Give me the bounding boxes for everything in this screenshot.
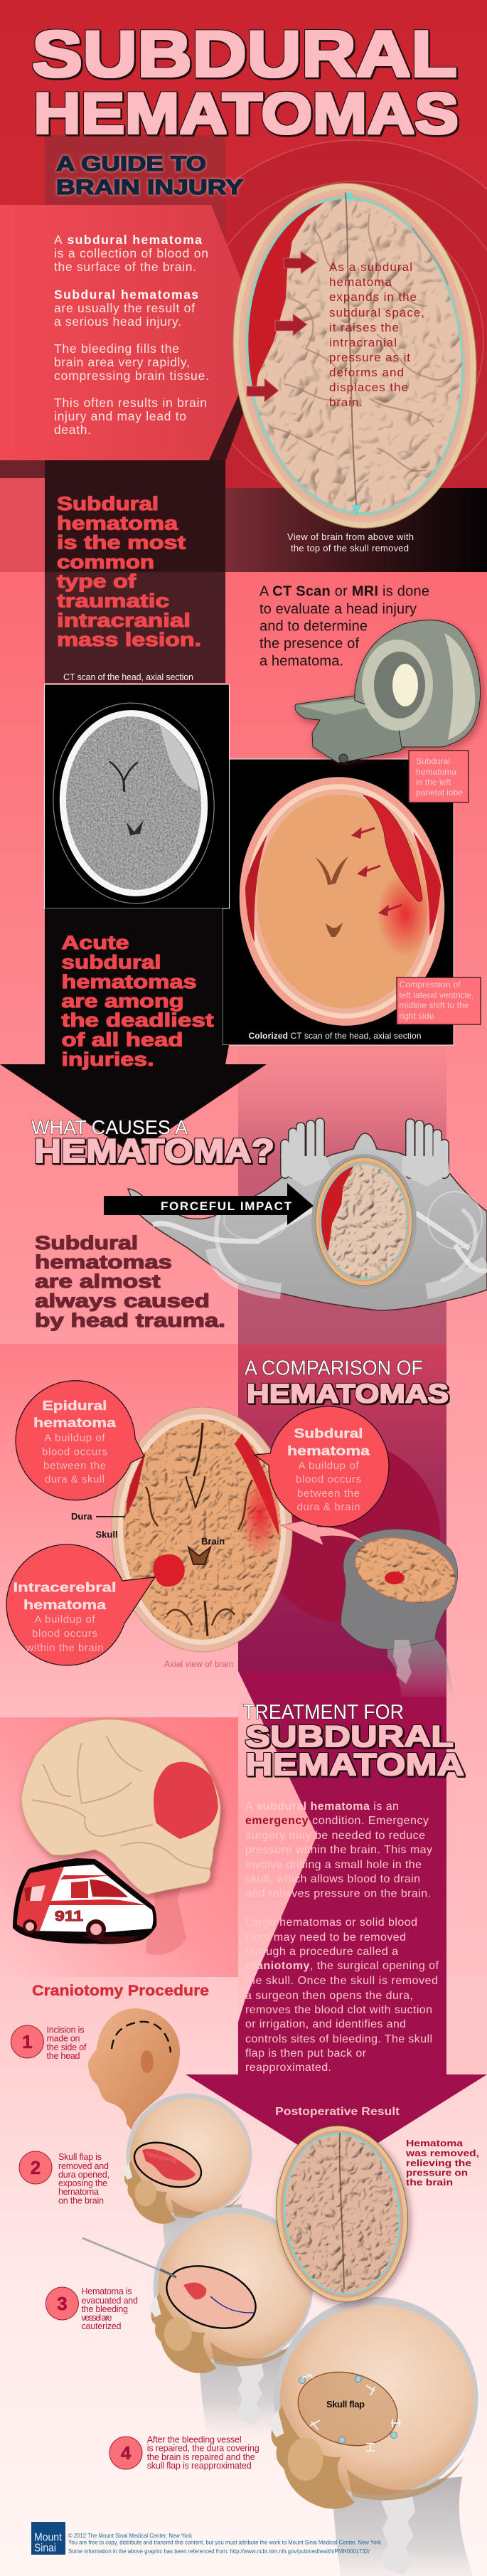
- callout: subdural in parietal lobe: in the left: [416, 777, 451, 787]
- text block: expansion explanation on brain: hematoma: [329, 275, 392, 289]
- text block: intro definition: A subdural hematoma: [54, 233, 202, 247]
- illustration: skull flap and exposed hematoma: [122, 2093, 252, 2276]
- text block: treatment explanation: and relieves pressure on the brain.: [245, 1888, 431, 1899]
- dark column behind intro: [45, 135, 225, 683]
- step 1: Incision is: [47, 2025, 84, 2035]
- step 1: [11, 2025, 87, 2061]
- label: skull: Skull: [95, 1530, 118, 1540]
- text block: treatment explanation: controls sites of bleeding. The skull: [245, 2033, 432, 2045]
- text block: treatment explanation: surgery may be needed to reduce: [245, 1830, 425, 1842]
- text block: treatment explanation: skull, which allows blood to drain: [245, 1873, 420, 1885]
- callout: subdural hematoma: A buildup of: [299, 1460, 359, 1472]
- title: HEMATOMAS: [33, 82, 459, 146]
- step 2: dura opened,: [58, 2170, 109, 2180]
- text block: treatment explanation: pressure within the brain. This may: [245, 1844, 432, 1856]
- step 3: vessel are: [81, 2313, 112, 2323]
- step 1: 1: [22, 2031, 33, 2052]
- callout: subdural hematoma: Subdural: [294, 1426, 363, 1441]
- step 2: on the brain: [58, 2195, 104, 2205]
- callout: subdural hematoma: dura & brain: [297, 1501, 360, 1513]
- text block: intro definition: a serious head injury.: [54, 314, 181, 329]
- text block: treatment explanation: A subdural hematoma is an: [245, 1801, 399, 1813]
- callout: acute subdural hematomas: subdural: [61, 952, 161, 973]
- panel: colourised CT background: [223, 759, 454, 1045]
- text block: CT or MRI: the presence of: [259, 636, 359, 652]
- step 4: 4: [121, 2442, 132, 2464]
- heading: what causes a hematoma: HEMATOMA?: [34, 1132, 274, 1170]
- text block: hematoma removed: [405, 2138, 479, 2188]
- text block: intro definition: Subdural hematomas: [54, 287, 198, 302]
- step 3: 3: [57, 2293, 68, 2314]
- dark lower band across the page: [0, 460, 487, 683]
- step 3: cauterized: [81, 2321, 122, 2331]
- text block: treatment explanation: craniotomy, the surgical opening of: [245, 1960, 439, 1972]
- heading: comparison of hematomas: [245, 1357, 449, 1409]
- callout: caused by head trauma: are almost: [35, 1271, 161, 1292]
- illustration: axial view of brain: [112, 1407, 292, 1652]
- callout: epidural hematoma: hematoma: [33, 1416, 117, 1430]
- illustration: MRI scanner: [295, 620, 481, 763]
- callout: acute subdural hematomas: injuries.: [61, 1049, 154, 1070]
- step 3: [46, 2286, 138, 2331]
- step 4: is repaired, the dura covering: [147, 2444, 259, 2454]
- callout: acute subdural hematomas: hematomas: [61, 971, 196, 992]
- label: dura: Dura: [71, 1511, 92, 1522]
- text block: intro definition: [54, 233, 209, 437]
- text block: intro definition: compressing brain tissue.: [54, 369, 209, 383]
- callout: most common lesion: hematoma: [57, 513, 178, 534]
- illustration: colourised CT scan: [229, 768, 455, 1034]
- text block: treatment explanation: flap is then put back or: [245, 2047, 367, 2060]
- callout: subdural hematoma: hematoma: [287, 1444, 370, 1458]
- step 2: removed and: [58, 2161, 109, 2171]
- callout: intracerebral hematoma: [6, 1544, 155, 1665]
- callout: epidural hematoma: A buildup of: [44, 1432, 105, 1444]
- text block: treatment explanation: reapproximated.: [245, 2062, 331, 2074]
- callout: most common lesion: common: [57, 551, 154, 573]
- title: SUBDURAL: [32, 18, 457, 90]
- illustration: side view of brain with hematoma: [21, 1719, 220, 1955]
- logo: Mount Sinai: [31, 2522, 65, 2555]
- logo: Mount Sinai: Mount: [34, 2532, 62, 2544]
- text block: expansion explanation on brain: displaces the: [329, 381, 408, 394]
- caption: view of brain: the top of the skull removed: [291, 543, 409, 553]
- text block: intro definition: This often results in brain: [54, 396, 207, 410]
- logo: Mount Sinai: Sinai: [34, 2543, 56, 2555]
- text block: intro definition: injury and may lead to: [54, 409, 186, 423]
- callout: caused by head trauma: Subdural: [35, 1232, 138, 1253]
- arrows: pressure on the brain: [247, 251, 316, 402]
- step 1: the head: [47, 2051, 80, 2061]
- callout: compression of left lateral ventricle: right side: [400, 1011, 434, 1021]
- callout: epidural hematoma: blood occurs: [42, 1446, 107, 1458]
- text block: CT or MRI: to evaluate a head injury: [259, 602, 417, 618]
- text block: intro definition: is a collection of blood on: [54, 246, 208, 260]
- callout: caused by head trauma: [35, 1232, 225, 1331]
- callout: subdural in parietal lobe: hematoma: [416, 767, 456, 777]
- text block: intro definition: death.: [54, 423, 91, 437]
- subtitle: a guide to brain injury: BRAIN INJURY: [56, 176, 243, 199]
- callout: subdural hematoma: [255, 1406, 389, 1527]
- illustration: body seen from above: [128, 1123, 487, 1310]
- step 4: [109, 2435, 259, 2471]
- callout: subdural in parietal lobe: parietal lobe: [416, 788, 463, 797]
- callout: intracerebral hematoma: Intracerebral: [13, 1581, 117, 1595]
- title: [32, 18, 459, 146]
- heading: comparison of hematomas: HEMATOMAS: [247, 1379, 449, 1409]
- text block: intro definition: are usually the result of: [54, 301, 195, 315]
- callout: compression of left lateral ventricle: [397, 977, 481, 1024]
- text block: expansion explanation on brain: intracranial: [329, 336, 397, 349]
- step 3: the bleeding: [81, 2304, 128, 2314]
- callout: epidural hematoma: between the: [43, 1460, 106, 1472]
- footer credits: You are free to copy, distribute and transmit this content, but you must attribute the work to Mount Sinai Medical Center, New York: [68, 2540, 382, 2546]
- illustration: evacuating the hematoma: [82, 2207, 314, 2440]
- text block: treatment explanation: emergency condition. Emergency: [245, 1815, 429, 1827]
- callout: compression of left lateral ventricle: Compression of: [400, 980, 461, 990]
- callout: most common lesion: traumatic: [57, 590, 169, 612]
- heading: what causes a hematoma: WHAT CAUSES A: [31, 1116, 188, 1138]
- callout: most common lesion: [57, 493, 201, 650]
- heading: craniotomy procedure: Craniotomy Procedure: [32, 1983, 209, 1999]
- heading: postoperative result: Postoperative Result: [275, 2106, 400, 2118]
- illustration: ambulance with 911: 911: [55, 1909, 83, 1924]
- callout: epidural hematoma: Epidural: [43, 1399, 107, 1413]
- illustration: skull flap and exposed hematoma: Hematoma: [146, 2150, 178, 2165]
- text block: hematoma removed: Hematoma: [406, 2138, 464, 2148]
- callout: acute subdural hematomas: are among: [61, 990, 183, 1012]
- illustration: skull flap reapproximated: Skull flap: [326, 2399, 365, 2410]
- arrow: from head to axial view: [281, 1517, 366, 1545]
- dark wedge beside intro arrow: [187, 338, 270, 541]
- text block: expansion explanation on brain: [329, 260, 424, 409]
- callout: most common lesion: is the most: [57, 531, 186, 553]
- callout: most common lesion: mass lesion.: [57, 629, 201, 650]
- subtitle: a guide to brain injury: A GUIDE TO: [56, 152, 206, 176]
- callout: intracerebral hematoma: within the brain: [26, 1642, 104, 1654]
- callout: subdural hematoma: blood occurs: [296, 1473, 361, 1485]
- heading: comparison of hematomas: A COMPARISON OF: [245, 1357, 423, 1380]
- callout: caused by head trauma: hematomas: [35, 1251, 172, 1273]
- illustration: skull flap reapproximated: [268, 2297, 479, 2576]
- text block: expansion explanation on brain: pressure as it: [329, 351, 410, 364]
- heading: treatment for subdural hematoma: SUBDURAL: [245, 1719, 454, 1753]
- text block: treatment explanation: involve drilling a small hole in the: [245, 1859, 422, 1871]
- footer credits: © 2012 The Mount Sinai Medical Center, New York: [68, 2533, 193, 2539]
- callout: compression of left lateral ventricle: midline shift to the: [400, 1000, 469, 1010]
- callout: intracerebral hematoma: hematoma: [23, 1598, 107, 1612]
- text block: treatment explanation: clots may need to be removed: [245, 1931, 406, 1944]
- step 2: Skull flap is: [58, 2152, 102, 2162]
- step 1: the side of: [47, 2042, 87, 2052]
- text block: treatment explanation: removes the blood clot with suction: [245, 2004, 432, 2016]
- panel: dark band behind guide heading: [45, 135, 186, 205]
- text block: intro definition: the surface of the brain.: [54, 260, 196, 274]
- text block: treatment explanation: [245, 1801, 439, 2074]
- caption: view of brain: [287, 531, 414, 553]
- callout: acute subdural hematomas: Acute: [61, 932, 129, 953]
- callout: intracerebral hematoma: A buildup of: [34, 1613, 95, 1626]
- label: dura: [71, 1511, 124, 1522]
- step 4: the brain is repaired and the: [147, 2452, 255, 2462]
- text block: treatment explanation: or irrigation, and identifies and: [245, 2018, 406, 2030]
- step 2: exposing the: [58, 2178, 107, 2188]
- subtitle: a guide to brain injury: [56, 152, 243, 199]
- illustration: head with incision line: [88, 2008, 180, 2130]
- callout: acute subdural hematomas: of all head: [61, 1029, 183, 1050]
- footer credits: Some information in the above graphic has been referenced from: http://www.ncbi.nlm.nih.gov/pubmedhealth/PMH0001732/: [68, 2548, 370, 2555]
- step 2: [19, 2151, 109, 2205]
- step 2: hematoma: [58, 2187, 99, 2197]
- caption: colourised CT: Colorized CT scan of the head, axial section: [249, 1031, 421, 1041]
- text block: CT or MRI: and to determine: [259, 619, 368, 635]
- footer credits: [68, 2533, 382, 2555]
- text block: intro definition: brain area very rapidly,: [54, 355, 190, 369]
- arrow: forceful impact: [104, 1183, 314, 1225]
- callout: caused by head trauma: by head trauma.: [35, 1310, 225, 1331]
- text block: treatment explanation: Large hematomas or solid blood: [245, 1917, 417, 1929]
- text block: CT or MRI: a hematoma.: [259, 654, 343, 669]
- panel: intro arrow-shaped panel: [0, 205, 264, 460]
- callout: acute subdural hematomas: [61, 932, 214, 1070]
- text block: treatment explanation: through a procedure called a: [245, 1946, 398, 1958]
- callout: intracerebral hematoma: blood occurs: [32, 1628, 97, 1640]
- illustration: head with cut brain: [341, 1527, 463, 1697]
- label: brain: Brain: [201, 1536, 225, 1547]
- callout: most common lesion: intracranial: [57, 610, 191, 631]
- text block: intro definition: The bleeding fills the: [54, 341, 179, 356]
- callout: compression of left lateral ventricle: left lateral ventricle,: [400, 990, 473, 1000]
- arrow: forceful impact: FORCEFUL IMPACT: [161, 1199, 292, 1213]
- step 2: 2: [31, 2157, 41, 2178]
- text block: expansion explanation on brain: deforms and: [329, 366, 404, 379]
- callout: epidural hematoma: [16, 1381, 144, 1500]
- step 1: made on: [47, 2034, 80, 2044]
- text block: treatment explanation: the skull. Once the skull is removed: [245, 1975, 438, 1987]
- panel: maroon treatment stripe: [186, 1344, 487, 2169]
- text block: hematoma removed: relieving the: [406, 2158, 471, 2168]
- callout: caused by head trauma: always caused: [35, 1290, 210, 1312]
- caption: view of brain: View of brain from above with: [287, 531, 414, 542]
- illustration: postoperative brain: [268, 2119, 416, 2309]
- heading: treatment for subdural hematoma: HEMATOMA: [245, 1747, 464, 1782]
- callout: most common lesion: type of: [57, 571, 137, 592]
- callout: acute subdural hematomas: the deadliest: [61, 1009, 214, 1031]
- step 3: Hematoma is: [81, 2286, 132, 2296]
- caption: axial view: Axial view of brain: [164, 1659, 233, 1669]
- text block: treatment explanation: a surgeon then opens the dura,: [245, 1990, 413, 2002]
- text block: CT or MRI: [259, 583, 429, 669]
- callout: epidural hematoma: dura & skull: [45, 1473, 105, 1485]
- text block: expansion explanation on brain: subdural space,: [329, 306, 424, 319]
- text block: expansion explanation on brain: expands in the: [329, 290, 417, 304]
- text block: expansion explanation on brain: As a subdural: [329, 260, 412, 274]
- text block: expansion explanation on brain: it raises the: [329, 321, 399, 334]
- callout: most common lesion: Subdural: [57, 493, 159, 514]
- illustration: ambulance with 911: [13, 1858, 156, 1944]
- callout: subdural in parietal lobe: Subdural: [416, 756, 450, 766]
- step 3: evacuated and: [81, 2296, 138, 2306]
- text block: expansion explanation on brain: brain.: [329, 396, 363, 409]
- text block: hematoma removed: was removed,: [405, 2148, 479, 2158]
- text block: hematoma removed: the brain: [406, 2177, 453, 2188]
- big black arrow: [0, 908, 267, 1154]
- caption: CT scan: CT scan of the head, axial section: [63, 672, 193, 682]
- text block: CT or MRI: A CT Scan or MRI is done: [259, 583, 429, 599]
- illustration: brain from above with hematoma: [233, 183, 476, 529]
- text block: hematoma removed: pressure on: [406, 2168, 468, 2178]
- illustration: CT scan image: [44, 684, 229, 909]
- heading: what causes a hematoma: [31, 1116, 274, 1170]
- callout: subdural hematoma: between the: [297, 1488, 360, 1500]
- heading: treatment for subdural hematoma: TREATMENT FOR: [243, 1701, 404, 1724]
- step 4: skull flap is reapproximated: [147, 2461, 252, 2471]
- step 4: After the bleeding vessel: [147, 2435, 242, 2445]
- callout: subdural in parietal lobe: [409, 751, 469, 802]
- disc rings behind the brain: [154, 140, 487, 543]
- heading: treatment for subdural hematoma: [243, 1701, 464, 1782]
